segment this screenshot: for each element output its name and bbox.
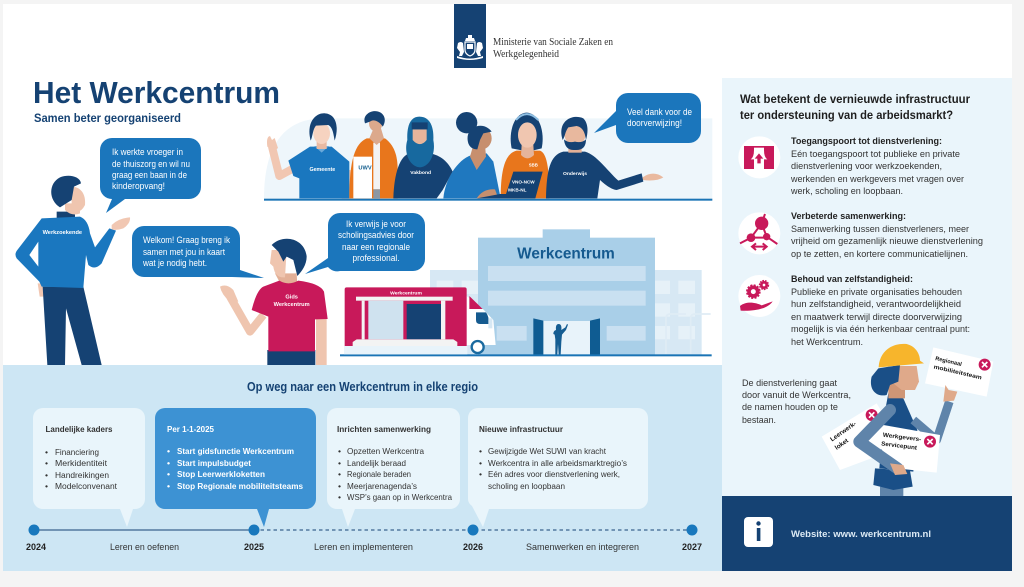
card: Nieuwe infrastructuur xyxy=(468,408,648,527)
card: Inrichten samenwerking: • xyxy=(338,446,341,456)
card: Per 1-1-2025: • xyxy=(167,469,170,479)
card: Inrichten samenwerking: Inrichten samenwerking xyxy=(337,424,431,434)
sign: Regionaal mobiliteitsteam: mobiliteitsteam xyxy=(933,364,982,381)
person: Gemeente xyxy=(267,113,351,199)
speech bubble: Ik verwijs: naar een regionale xyxy=(342,242,410,252)
card: Inrichten samenwerking: • xyxy=(338,469,341,479)
card: Per 1-1-2025: • xyxy=(167,458,170,468)
card: Per 1-1-2025 xyxy=(155,408,316,527)
card: Per 1-1-2025: • xyxy=(167,481,170,491)
sign: Leerwerkloket: loket xyxy=(834,437,851,452)
building: Werkcentrum xyxy=(340,229,712,356)
text: Verbeterde samenwerking: Verbeterde samenwerking: xyxy=(791,211,906,222)
logo: Rijksoverheid crest xyxy=(454,4,486,68)
card: Landelijke kaders: • xyxy=(45,470,48,480)
person: Gids Werkcentrum: Werkcentrum xyxy=(274,302,310,308)
panel heading xyxy=(740,92,970,122)
text: Toegangspoort: werk, scholing en loopbaan. xyxy=(790,186,903,197)
icon: gears on hand xyxy=(738,275,780,317)
icon: info xyxy=(744,517,773,547)
hard hat xyxy=(879,344,924,367)
card: Nieuwe infrastructuur: Werkcentra in alle arbeidsmarktregio’s xyxy=(488,458,627,468)
card: Per 1-1-2025: Start impulsbudget xyxy=(177,458,251,468)
person: colleague in blue shirt xyxy=(443,112,501,198)
website bar xyxy=(722,496,1012,571)
sign: Regionaal mobiliteitsteam xyxy=(925,347,993,397)
text: Toegangspoort xyxy=(790,136,964,197)
timeline heading: Op weg naar een Werkcentrum in elke regio xyxy=(247,380,478,394)
icon: gateway xyxy=(738,136,780,178)
speech bubble: Welkom: Welkom! Graag breng ik xyxy=(143,235,230,245)
timeline axis: 2024 xyxy=(26,542,46,552)
person: Onderwijs xyxy=(546,117,663,198)
card: Landelijke kaders: Landelijke kaders xyxy=(46,424,113,434)
person: SBB with laptop: VNO-NCW xyxy=(512,179,535,184)
card: Nieuwe infrastructuur: • xyxy=(479,469,482,479)
text: De dienstverlening gaat door: de namen houden op te xyxy=(742,402,838,413)
person: SBB with laptop xyxy=(477,113,549,198)
card: Inrichten samenwerking: Meerjarenagenda’s xyxy=(347,481,417,491)
speech bubble: Ik verwijs xyxy=(305,213,425,274)
card: Nieuwe infrastructuur: • xyxy=(479,458,482,468)
text: Toegangspoort: Eén toegangspoort tot publieke en private xyxy=(791,149,960,160)
speech bubble: Ik verwijs: professional. xyxy=(352,253,400,263)
subtitle: Samen beter georganiseerd xyxy=(34,111,181,125)
card: Landelijke kaders: Merkidentiteit xyxy=(55,458,108,468)
timeline axis xyxy=(26,524,702,553)
sign: Regionaal mobiliteitsteam: Regionaal xyxy=(935,356,963,368)
person: Gids Werkcentrum xyxy=(220,239,328,365)
speech bubble: Ik werkte vroeger: de thuiszorg en wil nu xyxy=(112,159,190,169)
sign: Werkgevers-Servicepunt xyxy=(871,425,940,473)
illustration: worker removing old names xyxy=(822,344,993,498)
card: Inrichten samenwerking: • xyxy=(338,458,341,468)
text: Behoud van zelfstandigheid xyxy=(791,274,970,348)
speech bubble: Ik werkte vroeger: Ik werkte vroeger in xyxy=(112,147,183,157)
panel: timeline xyxy=(3,365,722,571)
person: Werkzoekende: Werkzoekende xyxy=(43,230,82,236)
entrance with figure xyxy=(533,318,600,355)
card: Landelijke kaders xyxy=(33,408,145,527)
website bar: Website: www. werkcentrum.nl xyxy=(791,529,931,540)
card: Landelijke kaders: • xyxy=(45,481,48,491)
person: Onderwijs: Onderwijs xyxy=(563,171,587,177)
icon: network collaboration xyxy=(738,212,780,254)
panel heading: ter ondersteuning van de arbeidsmarkt? xyxy=(740,108,953,122)
speech bubble: Veel dank: Veel dank voor de xyxy=(627,107,692,117)
team of partner organisations xyxy=(264,111,712,201)
text: Behoud van zelfstandigheid: Publieke en private organisaties behouden xyxy=(791,287,962,298)
card: Inrichten samenwerking: Landelijk beraad xyxy=(347,458,406,468)
text: Verbeterde samenwerking: op te zetten, en kortere communicatielijnen. xyxy=(791,249,968,260)
text: Toegangspoort: werkenden en werkgevers met vragen over xyxy=(790,174,964,185)
text: Behoud van zelfstandigheid: het Werkcentrum. xyxy=(791,337,863,348)
timeline axis: Samenwerken en integreren xyxy=(526,542,639,553)
card: Per 1-1-2025: Per 1-1-2025 xyxy=(167,424,214,434)
text: Behoud van zelfstandigheid: hun zelfstandigheid, verantwoordelijkheid xyxy=(791,299,961,310)
speech bubble: Ik verwijs: scholingsadvies door xyxy=(338,230,414,240)
person: Vakbond: Vakbond xyxy=(410,170,431,176)
speech bubble: Veel dank xyxy=(594,93,701,143)
ministry name xyxy=(493,37,613,60)
card: Inrichten samenwerking: • xyxy=(338,481,341,491)
sign: Werkgevers-Servicepunt: Servicepunt xyxy=(881,441,917,452)
card: Landelijke kaders: Handreikingen xyxy=(55,470,109,480)
text: De dienstverlening gaat door: door vanuit de Werkcentra, xyxy=(742,390,851,401)
text: Verbeterde samenwerking: Samenwerking tussen dienstverleners, meer xyxy=(791,224,969,235)
card: Nieuwe infrastructuur: Nieuwe infrastructuur xyxy=(479,424,564,434)
timeline axis: 2025 xyxy=(244,542,264,552)
truck: mobile Werkcentrum xyxy=(344,287,496,354)
person: UWV xyxy=(349,111,398,198)
person: UWV: UWV xyxy=(358,165,372,171)
card: Per 1-1-2025: Start gidsfunctie Werkcentrum xyxy=(177,446,294,456)
text: Behoud van zelfstandigheid: en maatwerk terwijl directe doorverwijzing xyxy=(791,312,962,323)
card: Per 1-1-2025: • xyxy=(167,446,170,456)
card: Inrichten samenwerking xyxy=(327,408,460,527)
sign: Werkgevers-Servicepunt: Werkgevers- xyxy=(882,433,922,443)
timeline axis: Leren en oefenen xyxy=(110,542,179,553)
card: Per 1-1-2025: Stop Regionale mobiliteitsteams xyxy=(177,481,303,491)
speech bubble: Ik werkte vroeger xyxy=(100,138,201,213)
speech bubble: Welkom: wat je nodig hebt. xyxy=(142,258,207,268)
ministry name: Ministerie van Sociale Zaken en xyxy=(493,37,613,48)
ministry name: Werkgelegenheid xyxy=(493,49,559,60)
card: Inrichten samenwerking: Regionale beraden xyxy=(347,469,411,479)
speech bubble: Ik verwijs: Ik verwijs je voor xyxy=(346,219,406,229)
title: Het Werkcentrum xyxy=(33,75,280,110)
building sign: Werkcentrum xyxy=(517,245,615,262)
card: Nieuwe infrastructuur: • xyxy=(479,446,482,456)
text: Verbeterde samenwerking xyxy=(791,211,983,260)
text: Toegangspoort: dienstverlening voor werkzoekenden, xyxy=(791,161,942,172)
panel: infrastructure explanation xyxy=(722,78,1012,571)
card: Nieuwe infrastructuur: scholing en loopbaan xyxy=(488,481,565,491)
card: Nieuwe infrastructuur: Eén adres voor dienstverlening werk, xyxy=(488,469,620,479)
text: De dienstverlening gaat door: bestaan. xyxy=(742,415,776,426)
person: SBB with laptop: SBB xyxy=(529,162,538,167)
card: Inrichten samenwerking: WSP’s gaan op in Werkcentra xyxy=(347,492,452,502)
panel heading: Wat betekent de vernieuwde infrastructuur xyxy=(740,92,970,106)
card: Inrichten samenwerking: • xyxy=(338,492,341,502)
speech bubble: Veel dank: doorverwijzing! xyxy=(627,118,682,128)
text: Behoud van zelfstandigheid: Behoud van zelfstandigheid: xyxy=(791,274,913,285)
truck: mobile Werkcentrum: Werkcentrum xyxy=(390,290,422,296)
card: Nieuwe infrastructuur: Gewijzigde Wet SUWI van kracht xyxy=(488,446,607,456)
speech bubble: Ik werkte vroeger: kinderopvang! xyxy=(112,181,165,191)
timeline axis: 2027 xyxy=(682,542,702,552)
card: Landelijke kaders: • xyxy=(45,447,48,457)
text: Behoud van zelfstandigheid: mogelijk is via één herkenbaar centraal punt: xyxy=(791,324,970,335)
person: Werkzoekende xyxy=(15,176,130,365)
card: Inrichten samenwerking: Opzetten Werkcentra xyxy=(347,446,424,456)
person: Gids Werkcentrum: Gids xyxy=(285,294,298,300)
speech bubble: Welkom xyxy=(132,226,264,278)
text: De dienstverlening gaat door xyxy=(742,378,851,426)
card: Per 1-1-2025: Stop Leerwerkloketten xyxy=(177,469,265,479)
speech bubble: Ik werkte vroeger: graag een baan in de xyxy=(112,170,187,180)
text: De dienstverlening gaat door: De dienstverlening gaat xyxy=(742,378,837,389)
timeline axis: Leren en implementeren xyxy=(314,542,413,553)
timeline axis: 2026 xyxy=(463,542,483,552)
text: Verbeterde samenwerking: vrijheid om gezamenlijk nieuwe dienstverlening xyxy=(791,236,983,247)
card: Landelijke kaders: Modelconvenant xyxy=(55,481,118,491)
person: SBB with laptop: MKB-NL xyxy=(508,187,527,192)
sign: Leerwerkloket: Leerwerk- xyxy=(829,420,858,443)
card: Landelijke kaders: • xyxy=(45,458,48,468)
card: Landelijke kaders: Financiering xyxy=(55,447,99,457)
person: Gemeente: Gemeente xyxy=(309,167,335,173)
person: Vakbond xyxy=(393,117,453,198)
text: Toegangspoort: Toegangspoort tot dienstverlening: xyxy=(791,136,942,147)
speech bubble: Welkom: samen met jou in kaart xyxy=(143,247,225,257)
sign: Leerwerkloket xyxy=(822,403,903,470)
street lamps xyxy=(666,314,711,354)
